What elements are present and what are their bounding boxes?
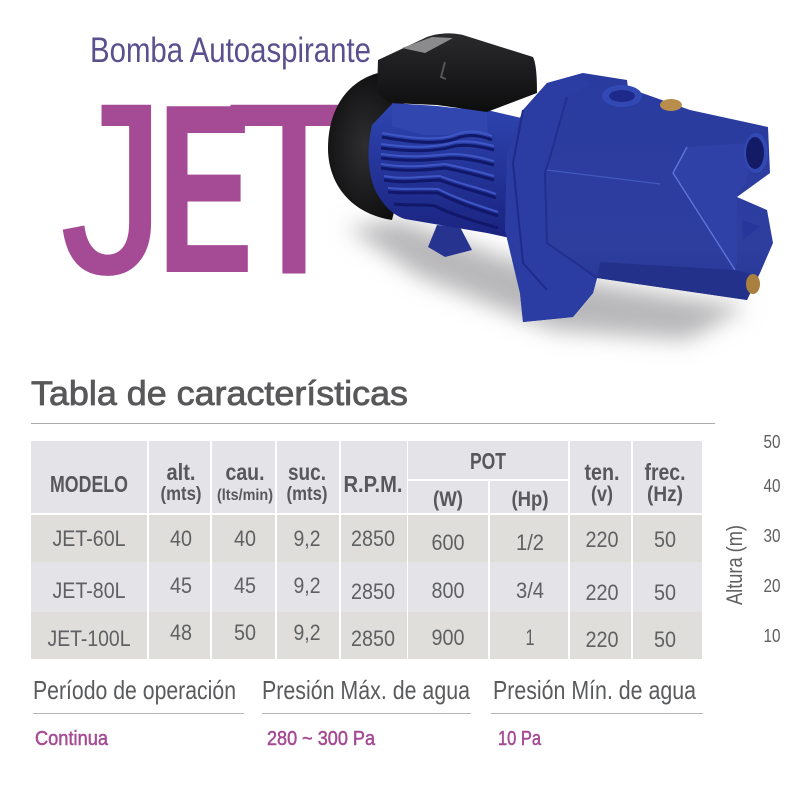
table header cells — [31, 441, 702, 513]
row: JET-60L: 9,2 — [294, 526, 320, 551]
table header labels: POT — [470, 448, 506, 474]
table header labels: MODELO — [50, 471, 128, 497]
row: JET-60L: 40 — [234, 526, 256, 551]
row: JET-100L: 900 — [432, 625, 464, 650]
title: JET: E — [157, 55, 253, 324]
table row shading — [31, 515, 702, 659]
side port — [744, 133, 768, 173]
spec: Presión Mín. de agua — [491, 675, 703, 750]
axis ticks — [764, 432, 780, 646]
pump shadow — [347, 220, 747, 340]
table header labels: R.P.M. — [344, 471, 402, 497]
row: JET-80L: 45 — [234, 573, 256, 598]
motor housing with fins — [369, 103, 530, 238]
top port — [602, 85, 642, 107]
row: JET-80L: 45 — [170, 573, 192, 598]
row: JET-100L: JET-100L — [48, 626, 130, 651]
table header labels: (v) — [591, 483, 613, 506]
row: JET-60L: 40 — [170, 526, 192, 551]
row: JET-100L: 220 — [586, 627, 618, 652]
table header labels: (Hz) — [647, 483, 683, 506]
table header labels — [50, 448, 686, 511]
row: JET-60L: 220 — [586, 527, 618, 552]
table header labels: (W) — [433, 488, 463, 511]
subtitle: Bomba Autoaspirante: Bomba Autoaspirante — [90, 31, 371, 70]
row: JET-100L — [48, 620, 676, 652]
row: JET-80L: JET-80L — [52, 578, 126, 603]
spec: Período de operación: Período de operación — [33, 675, 236, 705]
motor foot — [428, 225, 472, 257]
row: JET-80L: 800 — [432, 578, 464, 603]
table header labels: (Hp) — [512, 488, 548, 511]
terminal box — [377, 33, 537, 112]
table header labels: suc. — [288, 459, 326, 485]
brass plug top — [660, 99, 682, 111]
row: JET-80L: 9,2 — [294, 573, 320, 598]
table header labels: alt. — [166, 459, 196, 485]
spec: Período de operación: Continua — [35, 728, 109, 750]
row: JET-80L: 50 — [654, 580, 676, 605]
brass plug bottom — [746, 274, 760, 294]
axis ticks: 40 — [764, 476, 780, 496]
row: JET-60L — [52, 526, 676, 555]
row: JET-100L: 1 — [526, 625, 534, 650]
axis ticks: 50 — [764, 432, 780, 452]
row: JET-80L: 2850 — [351, 579, 395, 604]
row: JET-100L: 50 — [234, 620, 256, 645]
motor rear cover — [328, 73, 410, 220]
row: JET-60L: JET-60L — [52, 526, 126, 551]
row: JET-60L: 600 — [432, 530, 464, 555]
table of characteristics — [31, 441, 702, 659]
spec: Presión Mín. de agua: Presión Mín. de agua — [493, 675, 696, 705]
row: JET-100L: 9,2 — [294, 620, 320, 645]
row: JET-60L: 1/2 — [516, 530, 544, 555]
axis ticks: 10 — [764, 626, 780, 646]
table header labels: ten. — [584, 459, 620, 485]
row: JET-80L: 3/4 — [516, 578, 544, 603]
title: JET: J — [61, 54, 165, 323]
axis label: Altura (m): Altura (m) — [722, 525, 747, 605]
spec: Presión Máx. de agua — [262, 675, 471, 750]
axis ticks: 30 — [764, 526, 780, 546]
row: JET-100L: 48 — [170, 620, 192, 645]
section heading: Tabla de características: Tabla de características — [31, 375, 408, 413]
title: JET — [61, 53, 361, 324]
spec: Presión Máx. de agua: 280 ~ 300 Pa — [267, 728, 376, 750]
axis ticks: 20 — [764, 576, 780, 596]
row: JET-100L: 2850 — [351, 626, 395, 651]
row: JET-100L: 50 — [654, 627, 676, 652]
spec: Presión Mín. de agua: 10 Pa — [498, 728, 542, 750]
row: JET-60L: 50 — [654, 527, 676, 552]
table header labels: cau. — [226, 459, 264, 485]
table header labels: (mts) — [160, 484, 202, 505]
title: JET: T — [227, 53, 361, 323]
row: JET-80L: 220 — [586, 580, 618, 605]
spec: Período de operación — [33, 675, 244, 750]
row: JET-60L: 2850 — [351, 526, 395, 551]
table header labels: (lts/min) — [217, 487, 273, 504]
product image: JET water pump — [328, 33, 773, 340]
table header labels: frec. — [644, 459, 686, 485]
row: JET-80L — [52, 573, 676, 605]
table header labels: (mts) — [286, 484, 328, 505]
pump body — [505, 73, 773, 322]
spec: Presión Máx. de agua: Presión Máx. de agua — [262, 675, 470, 705]
